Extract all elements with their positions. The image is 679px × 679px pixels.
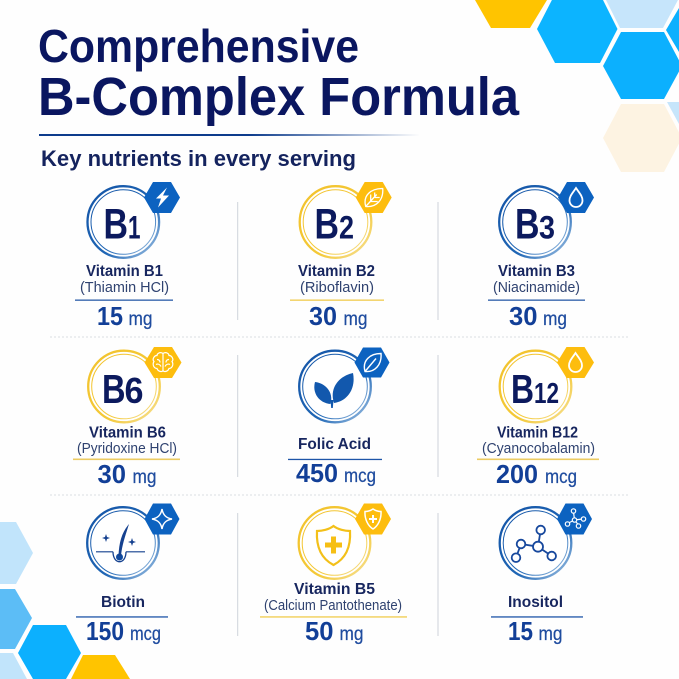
panel: Vitamin B1: B <box>104 200 128 248</box>
panel: Vitamin B5: mg <box>340 624 364 645</box>
panel: Vitamin B1: 1 <box>128 210 140 246</box>
panel: Inositol: Inositol <box>508 594 563 611</box>
panel: Vitamin B3: 30 <box>509 303 538 331</box>
panel: Biotin: 150 <box>86 618 124 646</box>
panel: Vitamin B5: 50 <box>305 618 334 646</box>
decorative honeycomb top right <box>475 0 679 172</box>
panel: Inositol <box>491 504 592 646</box>
panel: Biotin: Biotin <box>101 594 145 611</box>
panel: Vitamin B1: (Thiamin HCl) <box>80 280 169 296</box>
icon: brain badge <box>144 347 182 378</box>
icon: water drop badge <box>558 182 594 213</box>
icon: oil drop badge <box>557 347 594 378</box>
panel: Vitamin B2: (Riboflavin) <box>300 280 374 296</box>
panel: Folic Acid: 450 <box>296 460 338 488</box>
panel: Vitamin B2: B <box>314 200 339 248</box>
panel: Vitamin B3: B <box>515 200 540 248</box>
panel: Vitamin B3: mg <box>543 309 567 330</box>
panel: Vitamin B12: mcg <box>545 467 577 488</box>
panel: Folic Acid <box>288 348 390 488</box>
title <box>38 20 520 127</box>
panel: Vitamin B1 <box>75 182 180 331</box>
panel: Vitamin B1: 15 <box>97 303 123 331</box>
panel: Vitamin B6: B <box>102 366 126 412</box>
icon: leaf badge <box>354 348 390 378</box>
panel: Inositol: mg <box>538 624 562 645</box>
panel: Vitamin B12: (Cyanocobalamin) <box>482 441 595 457</box>
panel: Vitamin B2: 2 <box>339 210 354 246</box>
panel: Biotin <box>76 504 180 646</box>
panel: Vitamin B1: Vitamin B1 <box>86 263 163 280</box>
icon: molecule badge <box>557 504 592 534</box>
panel: Vitamin B6: mg <box>132 467 156 488</box>
icon: molecule <box>512 526 556 562</box>
panel: Vitamin B6 <box>73 347 182 489</box>
title: B-Complex Formula <box>38 67 520 127</box>
panel: Inositol: 15 <box>508 618 533 646</box>
title rule <box>39 134 420 136</box>
panel: Vitamin B12: Vitamin B12 <box>497 424 578 442</box>
panel: Vitamin B3 <box>488 182 594 331</box>
panel: Vitamin B3: (Niacinamide) <box>493 280 580 296</box>
panel: Vitamin B2 <box>290 182 392 331</box>
panel: Vitamin B6: Vitamin B6 <box>89 424 166 442</box>
icon: hair follicle <box>96 524 145 562</box>
panel: Vitamin B6: (Pyridoxine HCl) <box>77 441 177 457</box>
panel: Vitamin B1: mg <box>128 309 152 330</box>
panel: Vitamin B2: mg <box>344 309 368 330</box>
title: Comprehensive <box>38 20 359 72</box>
panel: Vitamin B5: Vitamin B5 <box>294 581 375 598</box>
icon: twin leaves <box>314 373 354 408</box>
panel: Vitamin B12: 200 <box>496 461 538 489</box>
panel: Vitamin B5 <box>260 504 407 646</box>
panel: Vitamin B12: 12 <box>534 378 559 410</box>
panel: Vitamin B6: 30 <box>98 461 126 489</box>
icon: sparkle badge <box>144 504 180 534</box>
panel: Vitamin B2: Vitamin B2 <box>298 263 375 280</box>
panel: Vitamin B12 <box>477 347 599 489</box>
panel: Vitamin B6: 6 <box>124 370 144 411</box>
decorative honeycomb bottom left <box>0 522 130 679</box>
icon: lightning bolt badge <box>144 182 180 213</box>
panel: Biotin: mcg <box>130 624 161 645</box>
icon: shield badge <box>355 504 391 534</box>
subtitle: Key nutrients in every serving <box>41 146 356 171</box>
panel: Folic Acid: Folic Acid <box>298 436 371 453</box>
icon: leaf badge <box>356 182 392 213</box>
panel: Vitamin B3: Vitamin B3 <box>498 263 575 280</box>
panel: Vitamin B12: B <box>511 366 534 412</box>
panel: Vitamin B3: 3 <box>539 210 555 246</box>
panel: Vitamin B2: 30 <box>309 303 337 331</box>
icon: shield with plus <box>317 526 350 565</box>
panel: Folic Acid: mcg <box>344 466 376 487</box>
panel: Vitamin B5: (Calcium Pantothenate) <box>264 598 402 614</box>
grid dividers <box>50 202 628 636</box>
